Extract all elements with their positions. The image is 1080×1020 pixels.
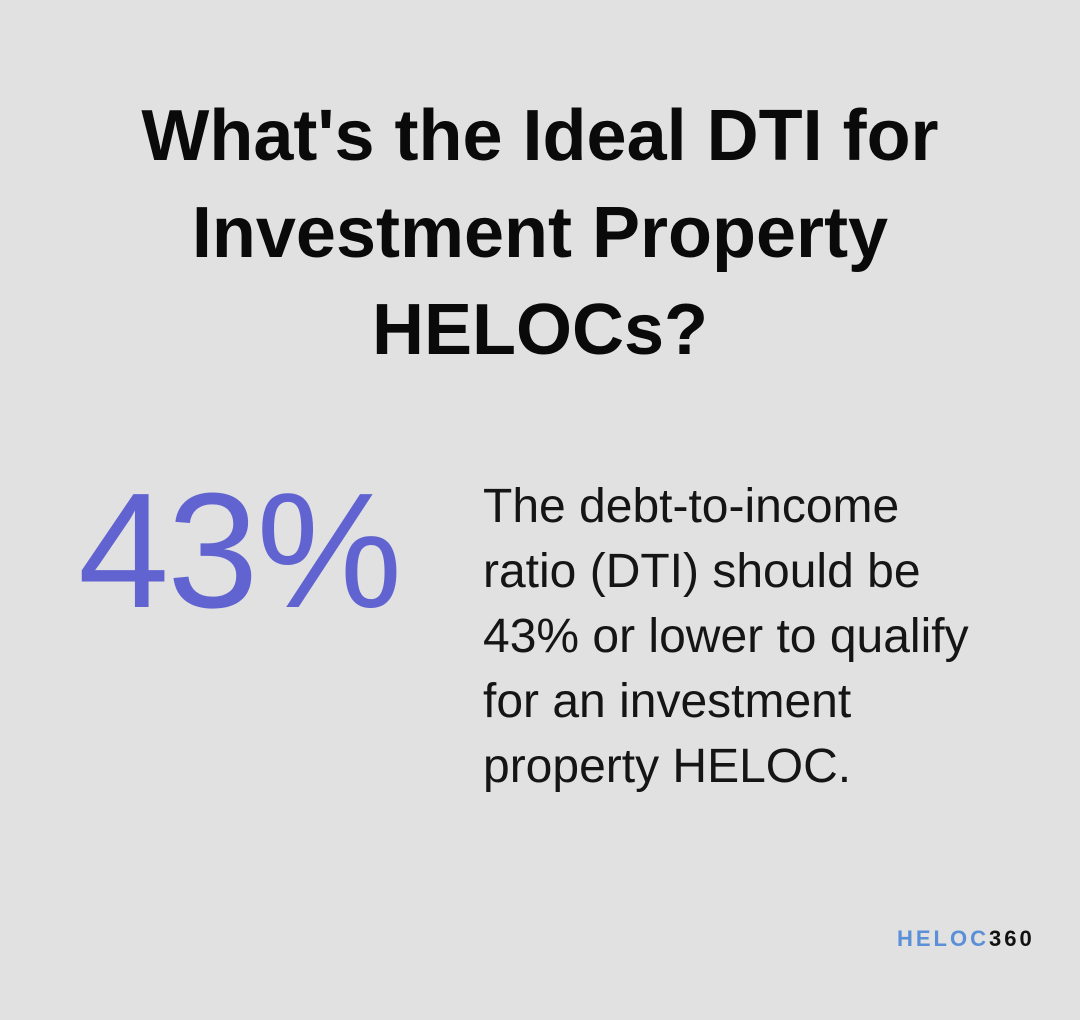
- logo: HELOC360: HELOC360: [897, 926, 1035, 951]
- description text: property HELOC.: [483, 740, 851, 793]
- big stat: 43%: 43%: [78, 459, 400, 642]
- title: What's the Ideal DTI for: [141, 96, 939, 176]
- title: HELOCs?: [372, 290, 708, 370]
- description text: The debt-to-income: [483, 480, 899, 533]
- title: Investment Property: [192, 193, 888, 273]
- description text: 43% or lower to qualify: [483, 610, 969, 663]
- title: [141, 96, 939, 370]
- description text: [483, 480, 969, 793]
- description text: ratio (DTI) should be: [483, 545, 921, 598]
- description text: for an investment: [483, 675, 851, 728]
